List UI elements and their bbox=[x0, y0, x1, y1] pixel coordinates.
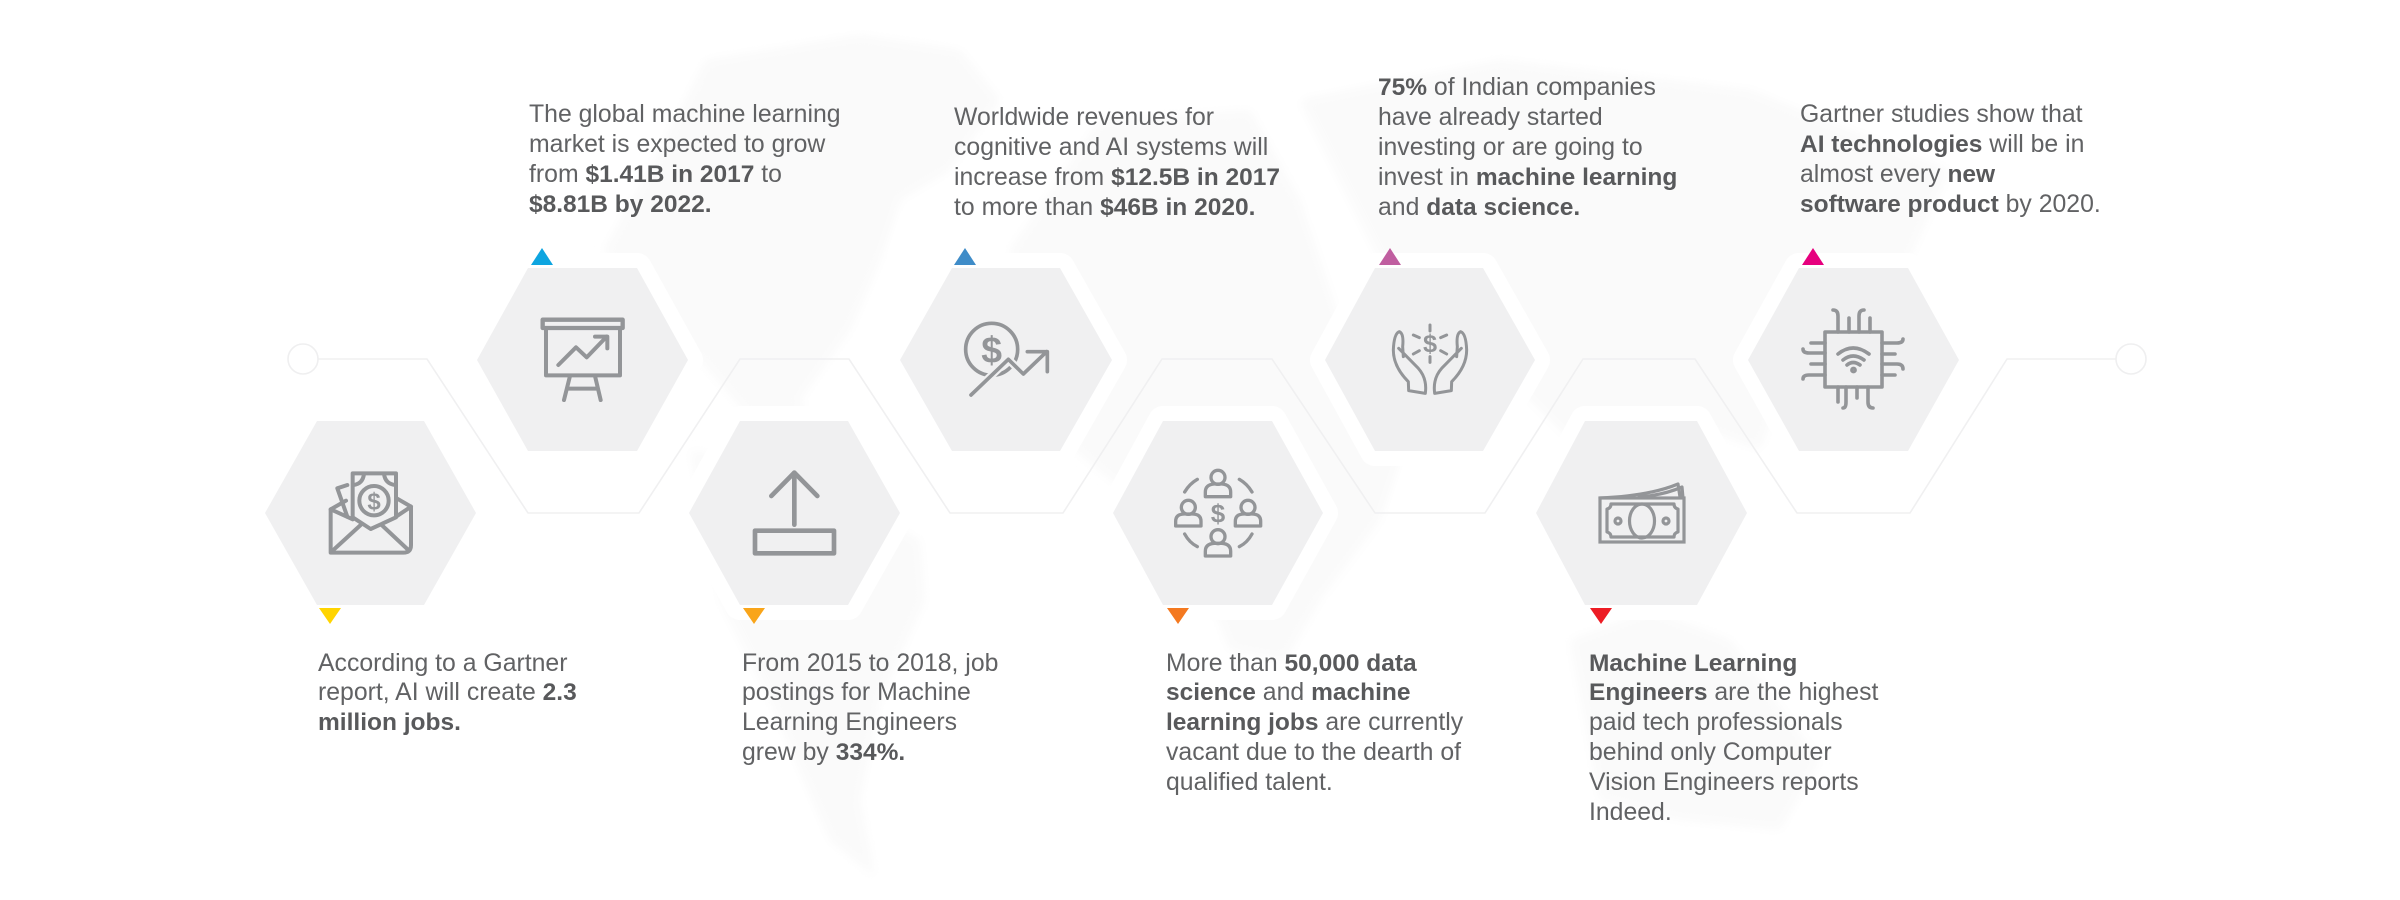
icon: people around dollar bbox=[1176, 470, 1261, 556]
text block 7: highest paid: paid tech professionals bbox=[1589, 709, 1843, 736]
text block 1: Gartner jobs: According to a Gartner bbox=[318, 650, 567, 676]
text block 7: highest paid: Engineers are the highest bbox=[1589, 679, 1878, 706]
icon: people around dollar: $ bbox=[1211, 499, 1226, 529]
text block 1: Gartner jobs: report, AI will create 2.3 bbox=[318, 679, 577, 706]
triangle marker: steel blue bbox=[954, 248, 976, 265]
triangle marker: mauve bbox=[1379, 248, 1401, 265]
text block 5: vacant jobs: More than 50,000 data bbox=[1166, 650, 1417, 676]
triangle marker: amber bbox=[743, 608, 765, 624]
text block 8: AI technologies: almost every new bbox=[1800, 161, 1995, 188]
text block 1: Gartner jobs: million jobs. bbox=[318, 709, 461, 736]
text block 7: highest paid: Machine Learning bbox=[1589, 650, 1797, 676]
icon: wifi chip bbox=[1803, 310, 1903, 408]
icon: envelope with money bbox=[331, 473, 411, 553]
text block 5: vacant jobs bbox=[1166, 650, 1463, 796]
hexagon 6 bbox=[1325, 268, 1535, 451]
icon: hands holding dollar: $ bbox=[1423, 330, 1437, 358]
text block 8: AI technologies: software product by 2020. bbox=[1800, 191, 2101, 218]
text block 5: vacant jobs: science and machine bbox=[1166, 679, 1410, 706]
text block 4: worldwide revenues: to more than $46B in 2020. bbox=[954, 194, 1255, 221]
text block 4: worldwide revenues: cognitive and AI systems will bbox=[954, 134, 1268, 161]
icon: envelope with money: $ bbox=[367, 488, 381, 515]
text block 3: job postings bbox=[742, 650, 998, 766]
triangle marker: red bbox=[1590, 608, 1612, 624]
text block 8: AI technologies: Gartner studies show that bbox=[1800, 101, 2083, 128]
text block 4: worldwide revenues: Worldwide revenues for bbox=[954, 104, 1214, 131]
text block 2: global machine learning market: $8.81B by 2022. bbox=[529, 191, 712, 218]
triangle marker: orange bbox=[1167, 608, 1189, 624]
text block 6: Indian companies: and data science. bbox=[1378, 194, 1580, 221]
text block 6: Indian companies: investing or are going to bbox=[1378, 134, 1643, 161]
text block 4: worldwide revenues bbox=[954, 104, 1280, 221]
icon: hands holding dollar bbox=[1393, 325, 1467, 393]
connector line bbox=[288, 344, 2146, 513]
text block 3: job postings: Learning Engineers bbox=[742, 709, 957, 736]
hexagon 8 bbox=[1748, 268, 1959, 451]
text block 7: highest paid bbox=[1589, 650, 1878, 826]
icon: coin with growth arrow bbox=[966, 323, 1047, 395]
icon: coin with growth arrow: $ bbox=[981, 328, 1002, 370]
text block 5: vacant jobs: vacant due to the dearth of bbox=[1166, 739, 1461, 766]
text block 6: Indian companies: 75% of Indian companies bbox=[1378, 74, 1656, 101]
hexagon 1 bbox=[265, 421, 476, 605]
text block 8: AI technologies bbox=[1800, 101, 2101, 218]
icon: banknotes bbox=[1600, 484, 1684, 542]
hexagon 2 bbox=[477, 268, 688, 451]
text block 5: vacant jobs: qualified talent. bbox=[1166, 769, 1333, 796]
text block 2: global machine learning market: from $1.41B in 2017 to bbox=[529, 161, 782, 188]
triangle marker: sky blue bbox=[531, 248, 553, 265]
hexagon 4 bbox=[900, 268, 1112, 451]
text block 7: highest paid: behind only Computer bbox=[1589, 739, 1832, 766]
text block 7: highest paid: Vision Engineers reports bbox=[1589, 769, 1859, 796]
text block 6: Indian companies: have already started bbox=[1378, 104, 1603, 131]
text block 3: job postings: grew by 334%. bbox=[742, 739, 905, 766]
text block 3: job postings: From 2015 to 2018, job bbox=[742, 650, 998, 676]
text block 7: highest paid: Indeed. bbox=[1589, 799, 1672, 826]
text block 4: worldwide revenues: increase from $12.5B in 2017 bbox=[954, 164, 1280, 191]
hexagon 3 bbox=[689, 421, 900, 605]
text block 1: Gartner jobs bbox=[318, 650, 577, 736]
hexagon 5 bbox=[1113, 421, 1323, 605]
text block 2: global machine learning market: market is expected to grow bbox=[529, 131, 825, 158]
text block 2: global machine learning market: The global machine learning bbox=[529, 101, 841, 128]
world map background bbox=[604, 35, 1950, 877]
text block 5: vacant jobs: learning jobs are currently bbox=[1166, 709, 1463, 736]
text block 6: Indian companies: invest in machine learning bbox=[1378, 164, 1677, 191]
text block 2: global machine learning market bbox=[529, 101, 841, 218]
icon: upload arrow bbox=[755, 473, 834, 553]
text block 3: job postings: postings for Machine bbox=[742, 679, 971, 706]
hexagon 7 bbox=[1536, 421, 1747, 605]
triangle marker: magenta bbox=[1802, 248, 1824, 265]
text block 8: AI technologies: AI technologies will be in bbox=[1800, 131, 2084, 158]
text block 6: Indian companies bbox=[1378, 74, 1677, 221]
icon: presentation board with rising chart bbox=[543, 320, 623, 400]
triangle marker: yellow bbox=[319, 608, 341, 624]
